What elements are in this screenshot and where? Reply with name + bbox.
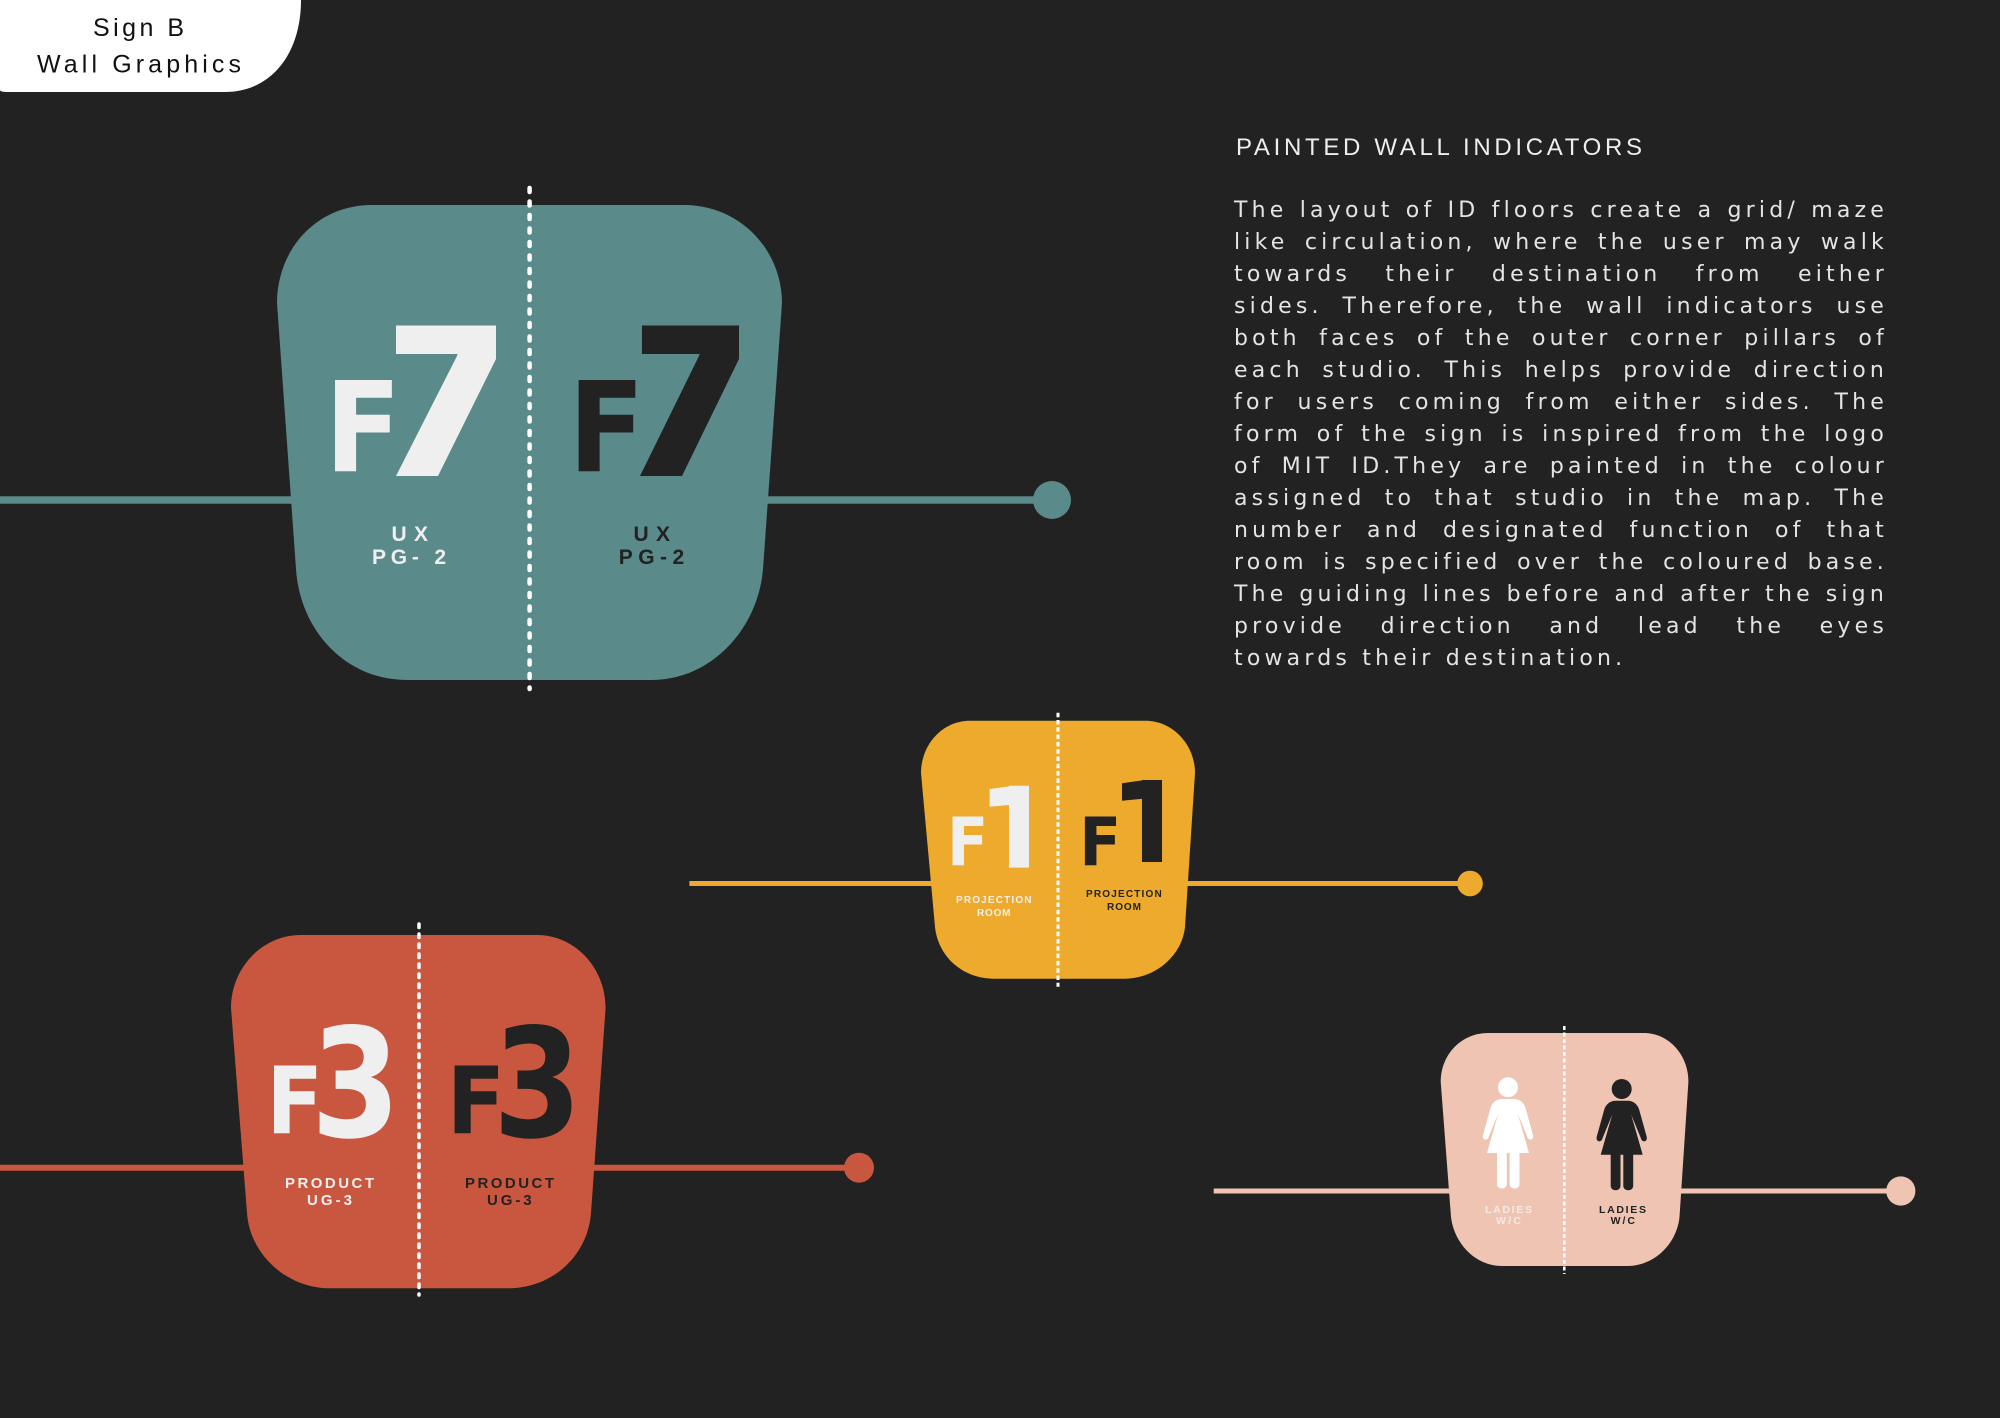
body text: both faces of the outer corner pillars of	[1234, 326, 1888, 351]
right face: F7 dark: F	[568, 355, 645, 501]
left face: F3 light: F	[266, 1048, 323, 1155]
guide line	[0, 1165, 859, 1171]
body text: provide direction and lead the eyes	[1234, 614, 1888, 639]
left face: F7 light	[335, 326, 496, 564]
icon: woman light	[1483, 1077, 1533, 1188]
right face: F1 dark: F	[1079, 803, 1121, 882]
left face: F3 light: PRODUCT	[285, 1175, 374, 1192]
label: ladies dark: LADIES	[1599, 1204, 1646, 1216]
body text: like circulation, where the user may walk	[1234, 230, 1888, 255]
right face: F1 dark: ROOM	[1107, 902, 1141, 913]
sign: red F3 product	[0, 924, 874, 1295]
body text: towards their destination.	[1234, 646, 1626, 671]
sign base	[277, 205, 782, 680]
right face: F1 dark: PROJECTION	[1086, 889, 1162, 900]
body text: form of the sign is inspired from the logo	[1234, 422, 1888, 447]
left face: F1 light: 1	[973, 762, 1058, 890]
right face: F7 dark: UX	[634, 523, 670, 546]
sign: pink ladies washroom	[1214, 1026, 1915, 1274]
end dot	[1033, 481, 1071, 519]
label: ladies light: W/C	[1496, 1215, 1521, 1227]
fold line	[1563, 1026, 1566, 1274]
icon: woman dark	[1597, 1079, 1647, 1190]
end dot	[844, 1153, 874, 1183]
sign base	[231, 935, 606, 1288]
left face: F3 light	[266, 997, 400, 1209]
fold line	[1056, 713, 1060, 987]
right face: F1 dark: 1	[1106, 757, 1191, 885]
left face: F1 light: PROJECTION	[956, 895, 1032, 906]
fold line	[527, 188, 532, 689]
guide line	[1214, 1188, 1901, 1194]
body text: of MIT ID.They are painted in the colour	[1234, 454, 1888, 479]
right face: F7 dark: PG-2	[619, 546, 684, 569]
end dot	[1886, 1176, 1915, 1206]
right face: F3 dark: F	[447, 1047, 505, 1155]
sign: orange F1 projection room	[689, 713, 1483, 987]
right face: F3 dark: 3	[493, 997, 582, 1173]
left face: F1 light: ROOM	[977, 908, 1010, 919]
left face: F7 light: UX	[392, 523, 428, 546]
left face: F1 light	[952, 786, 1031, 916]
sign: teal F7 UX	[0, 188, 1071, 689]
body text: The layout of ID floors create a grid/ maze	[1234, 198, 1888, 223]
right face: F3 dark	[447, 997, 582, 1209]
guide line	[0, 496, 1052, 504]
end dot	[1457, 871, 1483, 896]
right face: F7 dark	[578, 326, 739, 564]
left face: F1 light: F	[947, 804, 988, 882]
right face: F3 dark: PRODUCT	[465, 1175, 554, 1192]
right face: F3 dark: UG-3	[487, 1192, 532, 1209]
body text: room is specified over the coloured base.	[1234, 550, 1888, 575]
left face: F7 light: F	[325, 355, 401, 500]
body text	[1234, 198, 1888, 671]
body text: towards their destination from either	[1234, 262, 1888, 287]
left face: F7 light: 7	[384, 285, 508, 525]
label: ladies dark: W/C	[1611, 1215, 1635, 1227]
body text: sides. Therefore, the wall indicators use	[1234, 294, 1888, 319]
fold line	[417, 924, 421, 1295]
label: ladies light	[1485, 1204, 1532, 1227]
body text: each studio. This helps provide direction	[1234, 358, 1888, 383]
body text: The guiding lines before and after the sign	[1234, 582, 1888, 607]
right face: F1 dark	[1084, 780, 1162, 910]
label: ladies dark	[1599, 1204, 1646, 1227]
heading: painted wall indicators: PAINTED WALL INDICATORS	[1236, 134, 1642, 161]
right face: F7 dark: 7	[630, 284, 751, 525]
label: ladies light: LADIES	[1485, 1204, 1532, 1216]
tab: sign title: Sign B	[93, 14, 184, 42]
left face: F3 light: 3	[311, 997, 400, 1173]
tab: sign title: Wall Graphics	[37, 50, 241, 78]
guide line	[689, 881, 1470, 886]
sign base	[1441, 1033, 1688, 1266]
body text: assigned to that studio in the map. The	[1234, 486, 1888, 511]
tab: sign title	[0, 0, 301, 92]
body text: for users coming from either sides. The	[1234, 390, 1888, 415]
left face: F7 light: PG- 2	[372, 546, 446, 569]
left face: F3 light: UG-3	[307, 1192, 352, 1209]
sign base	[921, 721, 1195, 979]
body text: number and designated function of that	[1234, 518, 1888, 543]
